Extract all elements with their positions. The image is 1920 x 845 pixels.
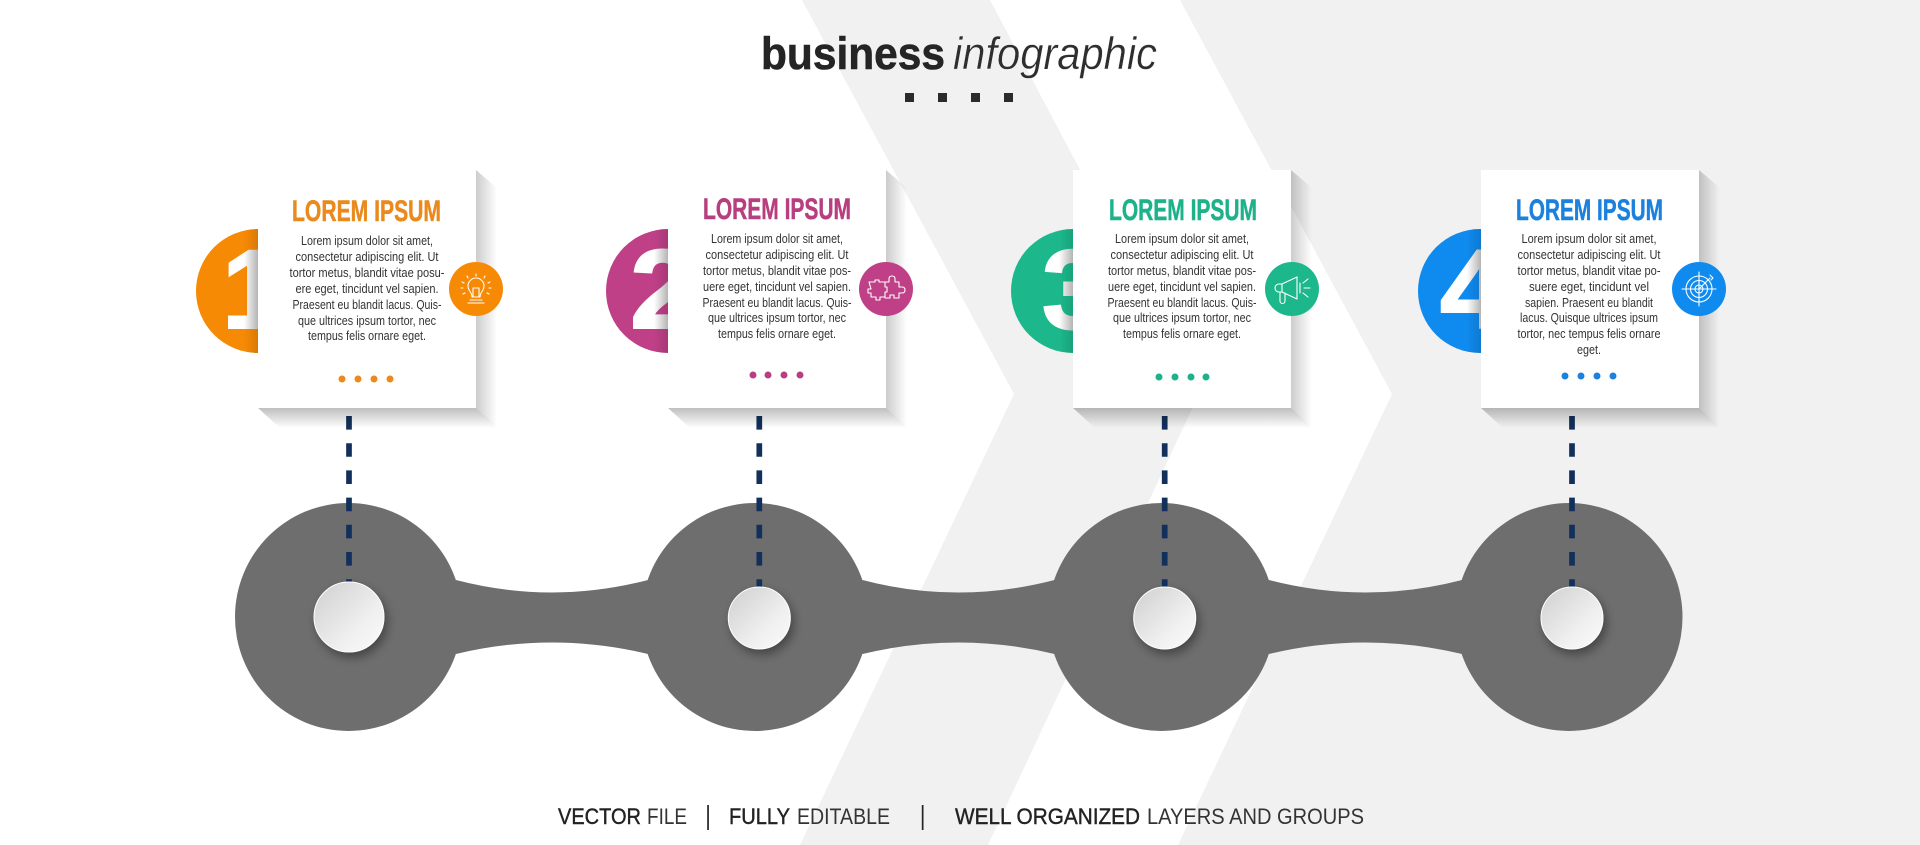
- number badge 1: [196, 229, 258, 353]
- body text 2: uere eget, tincidunt vel sapien.: [703, 279, 851, 294]
- body text 1: Lorem ipsum dolor sit amet,: [301, 233, 433, 248]
- body text 4: sapien. Praesent eu blandit: [1525, 295, 1653, 310]
- body text 1: tortor metus, blandit vitae posu-: [290, 265, 444, 280]
- body text 4: Lorem ipsum dolor sit amet,: [1522, 231, 1656, 246]
- card 4: [1481, 170, 1699, 408]
- card 2: [668, 170, 886, 408]
- body text 4: tortor, nec tempus felis ornare: [1518, 326, 1660, 341]
- number badge 2: [606, 229, 668, 353]
- panel: step 1: [196, 170, 503, 428]
- body text 2: que ultrices ipsum tortor, nec: [708, 310, 846, 325]
- title: infographic: [953, 28, 1157, 79]
- body text 2: [702, 231, 852, 341]
- number badge 3: 3: [1042, 227, 1104, 352]
- body text 3: que ultrices ipsum tortor, nec: [1113, 310, 1251, 325]
- dashed connector 2: [756, 416, 762, 590]
- pagination dots 2: [750, 372, 804, 378]
- card 1 shadow: [258, 170, 497, 428]
- body text 2: Lorem ipsum dolor sit amet,: [711, 231, 843, 246]
- number badge 4: [1418, 229, 1481, 353]
- dashed connector 1: [346, 416, 352, 590]
- pagination dots 4: [1562, 372, 1616, 380]
- pagination dots 3: [1156, 374, 1210, 380]
- background chevrons: [800, 0, 1920, 845]
- number badge 1: 1: [222, 227, 284, 352]
- body text 2: tempus felis ornare eget.: [718, 326, 836, 341]
- icon: light bulb: [449, 262, 503, 316]
- dashed connector 3: [1162, 416, 1168, 590]
- body text 4: suere eget, tincidunt vel: [1529, 279, 1649, 294]
- body text 3: [1108, 231, 1256, 341]
- body text 3: tempus felis ornare eget.: [1123, 326, 1241, 341]
- body text 1: ere eget, tincidunt vel sapien.: [296, 281, 438, 296]
- body text 1: que ultrices ipsum tortor, nec: [298, 313, 436, 328]
- icon: target: [1672, 262, 1726, 316]
- timeline node 3: [1134, 587, 1196, 649]
- body text 4: tortor metus, blandit vitae po-: [1518, 263, 1660, 278]
- body text 4: [1518, 231, 1661, 357]
- body text 4: eget.: [1577, 342, 1601, 357]
- body text 3: consectetur adipiscing elit. Ut: [1110, 247, 1254, 262]
- title: [761, 28, 1157, 79]
- number badge 3: [1011, 229, 1073, 353]
- body text 1: tempus felis ornare eget.: [308, 328, 426, 343]
- icon: megaphone: [1265, 262, 1319, 316]
- body text 3: Praesent eu blandit lacus. Quis-: [1108, 295, 1256, 310]
- heading 4: LOREM IPSUM: [1516, 194, 1663, 227]
- body text 4: lacus. Quisque ultrices ipsum: [1520, 310, 1658, 325]
- body text 3: Lorem ipsum dolor sit amet,: [1115, 231, 1249, 246]
- heading 3: LOREM IPSUM: [1109, 194, 1257, 227]
- body text 1: Praesent eu blandit lacus. Quis-: [292, 297, 442, 312]
- footer text: VECTOR: [558, 804, 641, 829]
- panel: step 3: [1011, 170, 1319, 428]
- number badge 4: 4: [1440, 227, 1508, 352]
- body text 4: consectetur adipiscing elit. Ut: [1518, 247, 1661, 262]
- footer text: EDITABLE: [797, 804, 890, 829]
- pagination dots 1: [338, 376, 394, 382]
- title dots: [905, 93, 1013, 102]
- card 3: [1073, 170, 1291, 408]
- body text 1: [290, 233, 444, 343]
- footer text: [558, 804, 1364, 830]
- card 2 shadow: [668, 170, 907, 428]
- panel: step 4: [1418, 170, 1726, 428]
- body text 3: tortor metus, blandit vitae pos-: [1108, 263, 1256, 278]
- body text 2: consectetur adipiscing elit. Ut: [706, 247, 849, 262]
- timeline node 1: [314, 582, 384, 652]
- timeline node 4: [1541, 587, 1603, 649]
- timeline band: [235, 503, 1682, 731]
- body text 2: Praesent eu blandit lacus. Quis-: [702, 295, 852, 310]
- body text 2: tortor metus, blandit vitae pos-: [703, 263, 851, 278]
- dashed connector 4: [1569, 416, 1575, 590]
- footer text: FULLY: [729, 804, 790, 829]
- number badge 2: 2: [630, 227, 696, 352]
- footer text: LAYERS AND GROUPS: [1147, 804, 1364, 829]
- icon: puzzle pieces: [859, 262, 913, 316]
- panel: step 2: [606, 170, 913, 428]
- card 1: [258, 170, 476, 408]
- footer text: FILE: [647, 804, 687, 829]
- card 4 shadow: [1481, 170, 1720, 428]
- footer text: WELL ORGANIZED: [955, 804, 1140, 829]
- heading 1: LOREM IPSUM: [292, 195, 441, 228]
- heading 2: LOREM IPSUM: [703, 193, 851, 226]
- timeline node 2: [728, 587, 790, 649]
- body text 3: uere eget, tincidunt vel sapien.: [1108, 279, 1256, 294]
- card 3 shadow: [1073, 170, 1312, 428]
- title: business: [761, 28, 945, 79]
- body text 1: consectetur adipiscing elit. Ut: [296, 249, 439, 264]
